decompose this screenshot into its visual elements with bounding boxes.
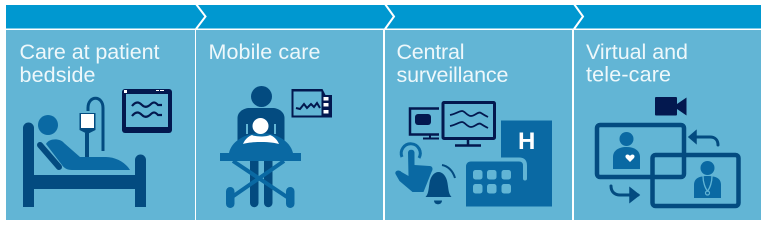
heading: care at patient bedside: Care at patient (20, 40, 160, 64)
icon: small workstation (410, 108, 439, 138)
top chevron band (6, 4, 761, 29)
icon: alarm bell (426, 165, 455, 204)
heading: care at patient bedside: bedside (20, 63, 96, 87)
heading: central surveillance: surveillance (396, 63, 508, 87)
icon: doctor video frame (652, 155, 738, 206)
icon: hand pressing button (395, 144, 433, 192)
panel: mobile care (196, 30, 383, 220)
panel: care at patient bedside (6, 30, 195, 220)
panel: central surveillance (385, 30, 572, 220)
heading: virtual and tele-care: Virtual and (586, 40, 688, 64)
icon: bedside monitor (122, 89, 172, 133)
panel: virtual and tele-care (574, 30, 761, 220)
heading: central surveillance: Central (396, 40, 464, 64)
icon: hospital building: H (518, 128, 535, 155)
arrow: bottom forward (611, 186, 639, 202)
icon: video camera (655, 97, 686, 116)
icon: carer pushing patient on stretcher (220, 86, 301, 208)
icon: large surveillance monitor (443, 102, 494, 146)
icon: patient in bed with IV (23, 98, 146, 207)
arrow: top return (689, 131, 718, 145)
heading: mobile care: Mobile care (208, 40, 320, 64)
icon: hospital building (466, 120, 552, 206)
icon: portable monitor (292, 89, 332, 118)
heading: virtual and tele-care: tele-care (586, 62, 671, 86)
icon: patient video frame (597, 125, 684, 177)
